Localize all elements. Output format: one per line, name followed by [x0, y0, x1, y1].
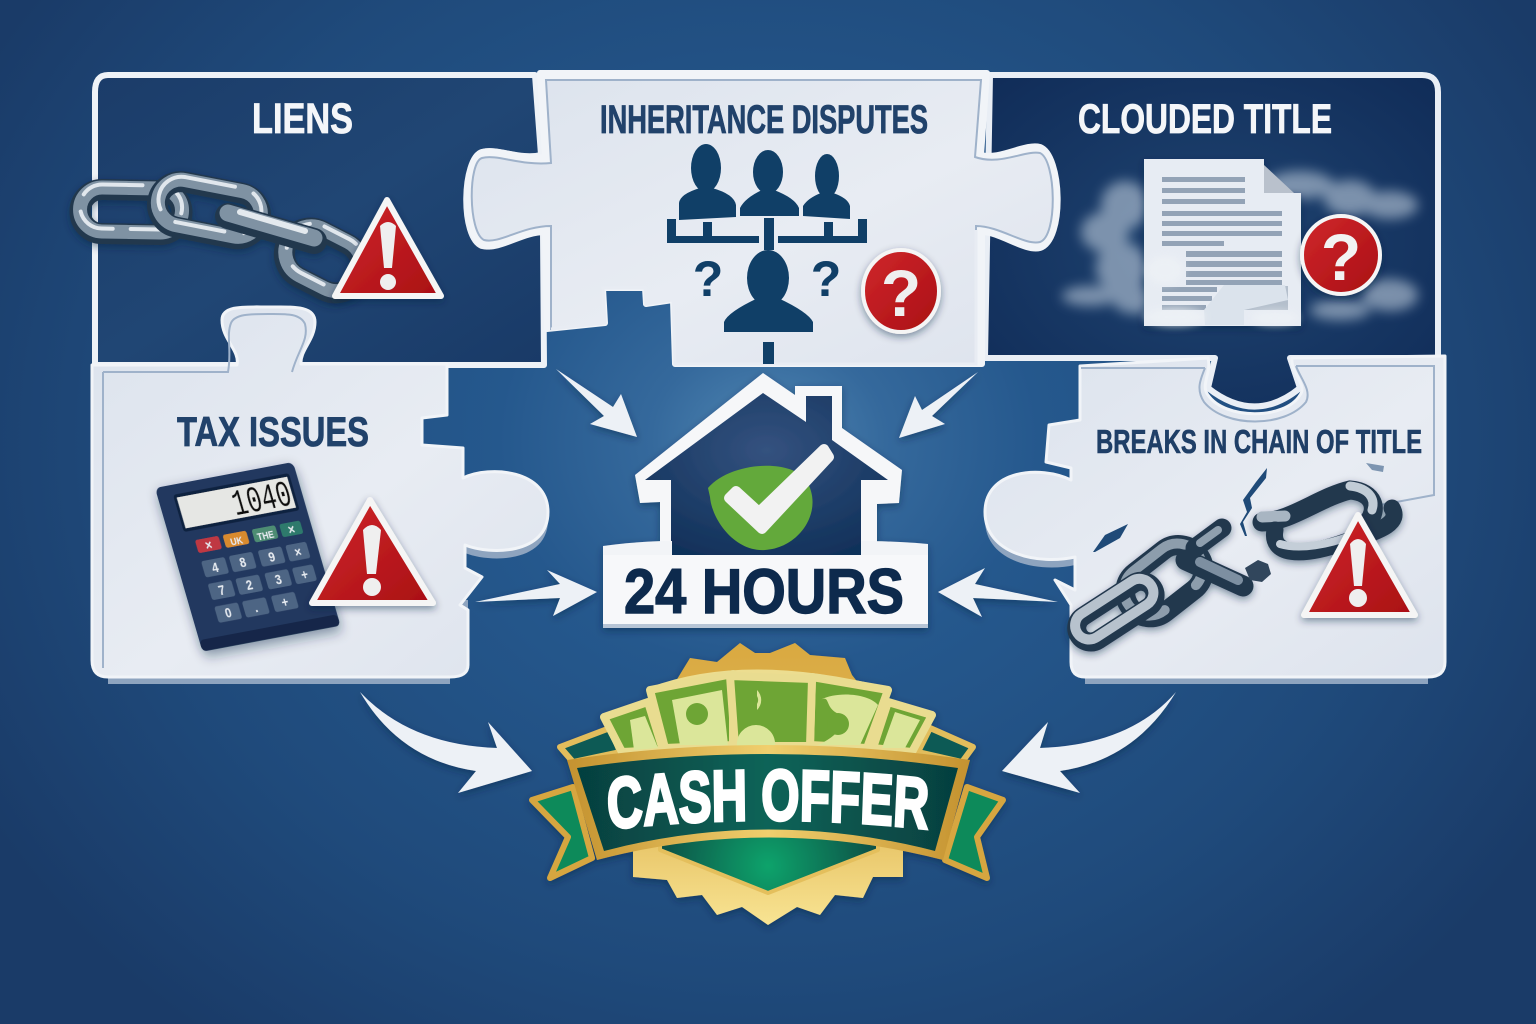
- calculator keys: +: [299, 567, 310, 583]
- calculator keys: ×: [286, 522, 297, 538]
- icon: fan of bills: [604, 672, 932, 752]
- heading: inheritance disputes: INHERITANCE DISPUTES: [600, 98, 928, 142]
- ribbon tails: [532, 728, 1003, 878]
- calculator keys: 8: [238, 555, 248, 571]
- heading: tax issues: TAX ISSUES: [177, 408, 369, 455]
- panel: inheritance disputes: [467, 73, 1058, 364]
- calculator keys: 9: [267, 549, 277, 565]
- icon: chain: [80, 173, 373, 302]
- heading: cash offer: CASH OFFER: [608, 768, 929, 830]
- calculator keys: ×: [203, 537, 214, 553]
- panel: breaks in chain of title: [985, 356, 1445, 684]
- ribbon: [567, 745, 970, 864]
- icon: question badge: ?: [881, 256, 921, 330]
- calculator display: [173, 473, 301, 537]
- icon: cracks in the panel: [1093, 463, 1384, 552]
- calculator keys: 3: [273, 572, 284, 588]
- calculator keys: +: [280, 595, 290, 611]
- icon: warning triangle: [335, 200, 441, 296]
- icon: house: [635, 373, 902, 560]
- shield below ribbon: [660, 835, 878, 893]
- icon: question badge: ?: [1321, 220, 1361, 294]
- icon: calculator: [155, 462, 340, 652]
- panel: tax issues: [92, 307, 548, 684]
- arrow: right curve to cash offer: [1002, 692, 1176, 793]
- icon: warning triangle: [312, 500, 433, 603]
- center: house with 24 hours banner: [603, 373, 928, 628]
- icon: document: [1144, 159, 1301, 326]
- icon: green check: [708, 449, 829, 550]
- calculator display: 1040: [228, 476, 297, 527]
- icon: question badge: [1302, 216, 1380, 294]
- icon: broken chain fragment: [1245, 560, 1271, 582]
- icon: broken chain: [1070, 486, 1394, 647]
- panel: liens: [80, 75, 544, 365]
- arrow: breaks to house: [938, 568, 1058, 617]
- calculator keys: THE: [256, 529, 275, 542]
- banner: 24 hours: 24 HOURS: [624, 557, 904, 627]
- icon: question badge: [863, 250, 939, 332]
- calculator keys: .: [252, 600, 260, 616]
- calculator keys: [195, 520, 324, 623]
- calculator keys: UK: [229, 535, 244, 547]
- calculator keys: 2: [244, 577, 255, 593]
- calculator keys: 4: [210, 560, 221, 576]
- heading: breaks in chain of title: BREAKS IN CHAIN OF TITLE: [1096, 423, 1422, 460]
- calculator keys: 0: [223, 605, 234, 621]
- arrow: inheritance to house: [556, 369, 637, 437]
- icon: family tree of heirs: ?: [693, 251, 723, 307]
- arrow: left curve to cash offer: [360, 692, 532, 793]
- calculator keys: ×: [293, 544, 303, 560]
- panel: clouded title: [985, 75, 1438, 406]
- gold starburst: [633, 643, 903, 925]
- heading: liens: LIENS: [252, 95, 353, 143]
- icon: family tree of heirs: [667, 144, 867, 364]
- icon: cloud in front of document: [1145, 256, 1299, 326]
- arrow: clouded title to house: [899, 372, 978, 438]
- icon: clouds behind document: [1062, 171, 1418, 320]
- icon: warning triangle: [1304, 515, 1415, 615]
- calculator keys: 7: [217, 583, 227, 598]
- arrow: tax issues to house: [475, 570, 597, 616]
- badge: cash offer: [528, 643, 1007, 928]
- heading: cash offer: [608, 768, 929, 830]
- heading: clouded title: CLOUDED TITLE: [1078, 95, 1332, 142]
- icon: family tree of heirs: ?: [811, 251, 841, 307]
